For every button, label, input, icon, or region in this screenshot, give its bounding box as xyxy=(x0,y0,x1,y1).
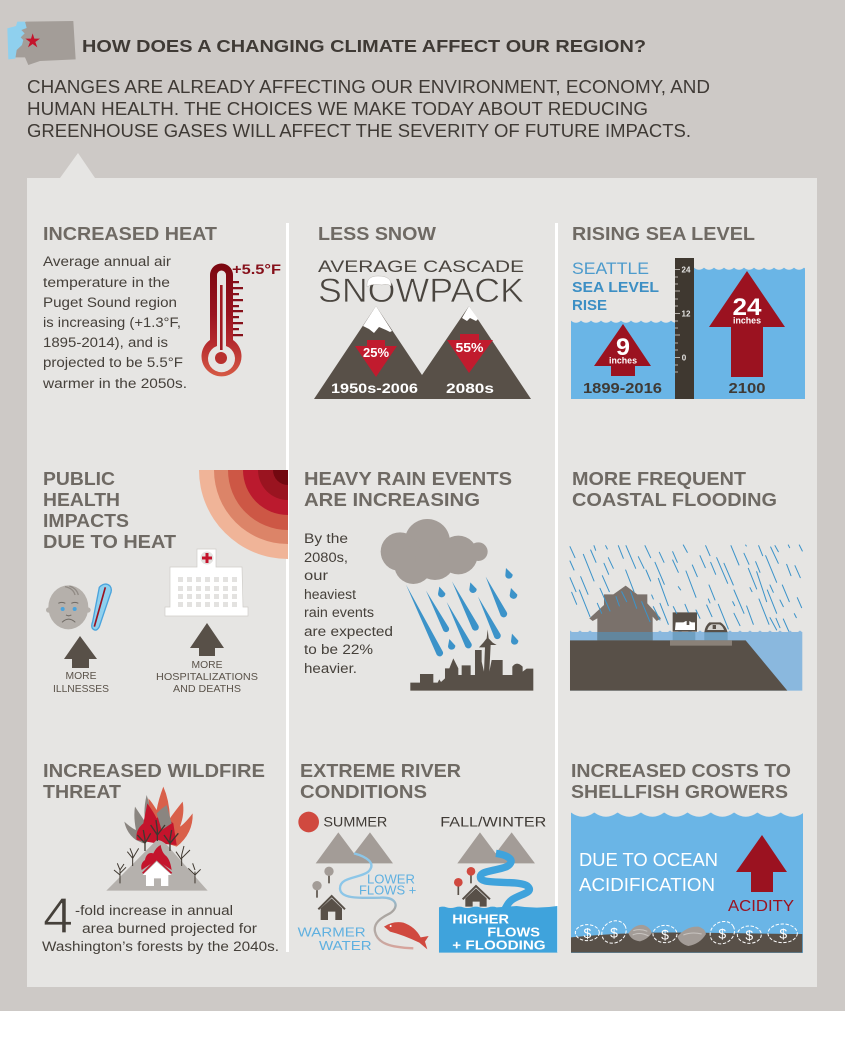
label: more hospitalizations and deaths: MORE xyxy=(192,659,222,671)
text: rain body: heavier. xyxy=(304,661,357,676)
text: rain body: 2080s, xyxy=(304,550,348,565)
chart: 2100 water level xyxy=(694,267,805,399)
panel: increased wildfire threat xyxy=(42,760,279,954)
chart: ruler: 24 xyxy=(682,266,691,274)
illustration: summer river: WATER xyxy=(319,938,372,953)
text: rain body xyxy=(304,531,393,676)
chart: ruler xyxy=(675,258,694,399)
label: more illnesses xyxy=(53,670,109,695)
heading: public health: DUE TO HEAT xyxy=(43,531,177,552)
icon: mountains with snow loss: 1950s-2006 xyxy=(331,380,418,396)
panel: increased heat xyxy=(42,223,282,391)
illustration: summer river: FLOWS + xyxy=(359,883,416,897)
chart title: average cascade snowpack: AVERAGE CASCADE xyxy=(318,258,524,276)
heading: river conditions: EXTREME RIVER xyxy=(300,760,461,781)
heading: shellfish costs: INCREASED COSTS TO xyxy=(571,760,791,781)
chart: 1899-2016 water level: 1899-2016 xyxy=(583,381,662,397)
chart title: average cascade snowpack xyxy=(318,258,524,310)
icon: rain cloud over Seattle skyline xyxy=(381,519,533,691)
intro text: HUMAN HEALTH. THE CHOICES WE MAKE TODAY ABOUT REDUCING xyxy=(27,99,648,119)
panel: extreme river conditions xyxy=(298,760,557,953)
chart: 2100 water level: inches xyxy=(733,316,761,326)
text: rain body: our xyxy=(304,568,329,583)
label: more illnesses: ILLNESSES xyxy=(53,683,109,695)
illustration: ocean acidification: $ xyxy=(661,926,669,942)
heading: public health: HEALTH xyxy=(43,489,120,510)
chart: 1899-2016 water level: 9 xyxy=(616,334,630,361)
illustration: fall and winter river: HIGHER xyxy=(452,913,509,927)
panel: public health impacts xyxy=(44,470,288,692)
illustration: ocean acidification: $ xyxy=(583,925,591,941)
heading: wildfire xyxy=(43,760,265,802)
intro text: GREENHOUSE GASES WILL AFFECT THE SEVERITY OF FUTURE IMPACTS. xyxy=(27,121,691,141)
icon: thermometer xyxy=(202,261,282,376)
arrow: more hospitalizations xyxy=(190,623,224,656)
illustration: ocean acidification: $ xyxy=(610,924,618,940)
heading: public health: IMPACTS xyxy=(43,510,129,531)
text: rain body: heaviest xyxy=(304,587,356,602)
heading: coastal flooding xyxy=(572,468,777,510)
chart: 1899-2016 water level xyxy=(571,320,675,399)
icon: mountains with snow loss xyxy=(314,306,531,399)
illustration: fall and winter river: + FLOODING xyxy=(452,938,546,952)
text: heat body: Puget Sound region xyxy=(43,295,177,310)
text: seattle sea level rise xyxy=(572,259,659,314)
icon: Washington state map xyxy=(7,21,76,65)
label: more illnesses: MORE xyxy=(66,670,96,682)
chart: 2100 water level: 2100 xyxy=(728,381,766,397)
chart: ruler: 0 xyxy=(682,354,687,362)
text: heat body: warmer in the 2050s. xyxy=(42,376,187,391)
text: rain body: to be 22% xyxy=(304,642,373,657)
text: heat body: 1895-2014), and is xyxy=(43,335,168,350)
label: more hospitalizations and deaths xyxy=(156,659,258,695)
text: four-fold increase xyxy=(42,888,279,954)
label: more hospitalizations and deaths: AND DEATHS xyxy=(173,683,241,695)
chart: ruler: 12 xyxy=(682,310,691,318)
text: heat body: temperature in the xyxy=(43,275,170,290)
intro text: CHANGES ARE ALREADY AFFECTING OUR ENVIRONMENT, ECONOMY, AND xyxy=(27,77,710,97)
text: rain body: By the xyxy=(304,531,348,546)
heading: wildfire: INCREASED WILDFIRE xyxy=(43,760,265,781)
text: rain body: rain events xyxy=(304,605,374,620)
illustration: ocean acidification: ACIDITY xyxy=(728,898,794,915)
footer band xyxy=(0,1011,845,1039)
heading: shellfish costs xyxy=(571,760,791,802)
illustration: summer river: SUMMER xyxy=(323,814,387,830)
heading: heavy rain xyxy=(304,468,512,510)
chart: 1899-2016 water level: inches xyxy=(609,356,637,366)
text: four-fold increase: area burned projected for xyxy=(82,921,258,936)
panel: less snow xyxy=(314,223,531,399)
text: seattle sea level rise: SEA LEVEL xyxy=(572,280,659,296)
panel: shellfish growers xyxy=(571,760,803,953)
heading: river conditions: CONDITIONS xyxy=(300,781,427,802)
text: rain body: are expected xyxy=(304,624,393,639)
illustration: ocean acidification: $ xyxy=(779,926,787,942)
arrow: more illnesses xyxy=(64,636,97,668)
illustration: fall and winter river: FLOWS xyxy=(487,926,540,940)
text: four-fold increase: Washington’s forests by the 2040s. xyxy=(42,939,279,954)
panel: rising sea level xyxy=(571,223,805,399)
text: heat body: is increasing (+1.3°F, xyxy=(43,315,181,330)
icon: flooded coast scene xyxy=(570,545,802,691)
heading: rising sea level: RISING SEA LEVEL xyxy=(572,223,755,244)
heading: river conditions xyxy=(300,760,461,802)
text: seattle sea level rise: RISE xyxy=(572,298,607,314)
illustration: ocean acidification: ACIDIFICATION xyxy=(579,875,715,895)
title: HOW DOES A CHANGING CLIMATE AFFECT OUR REGION? xyxy=(82,36,646,56)
text: heat body: Average annual air xyxy=(43,254,172,269)
heading: public health xyxy=(43,468,177,552)
heading: less snow: LESS SNOW xyxy=(318,223,437,244)
illustration: ocean acidification: $ xyxy=(718,926,726,942)
heading: public health: PUBLIC xyxy=(43,468,115,489)
heading: heavy rain: ARE INCREASING xyxy=(304,489,480,510)
text: heat body: projected to be 5.5°F xyxy=(43,355,183,370)
panel: heavy rain events xyxy=(304,468,533,691)
heading: wildfire: THREAT xyxy=(43,781,122,802)
icon: mountains with snow loss: 55% xyxy=(456,340,484,355)
main panel xyxy=(27,153,817,987)
illustration: ocean acidification: $ xyxy=(745,927,753,943)
illustration: ocean acidification xyxy=(571,812,803,953)
text: seattle sea level rise: SEATTLE xyxy=(572,259,649,278)
label: more hospitalizations and deaths: HOSPITALIZATIONS xyxy=(156,671,258,683)
icon: mountains with snow loss: 2080s xyxy=(446,380,494,396)
illustration: fall and winter river xyxy=(439,814,557,953)
text: four-fold increase: -fold increase in annual xyxy=(75,903,233,918)
illustration: ocean acidification: DUE TO OCEAN xyxy=(579,850,718,870)
chart title: average cascade snowpack: SNOWPACK xyxy=(318,272,524,310)
chart: 2100 water level: 24 xyxy=(732,294,762,321)
heading: shellfish costs: SHELLFISH GROWERS xyxy=(571,781,788,802)
heading: coastal flooding: MORE FREQUENT xyxy=(572,468,747,489)
icon: thermometer: +5.5°F xyxy=(232,261,282,277)
illustration: summer river: LOWER xyxy=(367,872,415,886)
icon: hospital xyxy=(165,549,248,616)
icon: mountains with snow loss: 25% xyxy=(363,346,389,360)
heading: heavy rain: HEAVY RAIN EVENTS xyxy=(304,468,512,489)
panel: coastal flooding xyxy=(570,468,802,691)
text: four-fold increase: 4 xyxy=(43,888,73,944)
icon: burning hillside with house xyxy=(106,787,208,891)
illustration: fall and winter river: FALL/WINTER xyxy=(440,814,546,830)
intro text xyxy=(27,77,710,141)
illustration: summer river xyxy=(298,812,429,953)
heading: coastal flooding: COASTAL FLOODING xyxy=(572,489,777,510)
illustration: summer river: WARMER xyxy=(298,925,366,940)
heading: increased heat: INCREASED HEAT xyxy=(43,223,218,244)
icon: heat radiating arcs xyxy=(199,470,288,559)
icon: sick baby with thermometer xyxy=(46,584,111,630)
text: heat body xyxy=(42,254,187,391)
